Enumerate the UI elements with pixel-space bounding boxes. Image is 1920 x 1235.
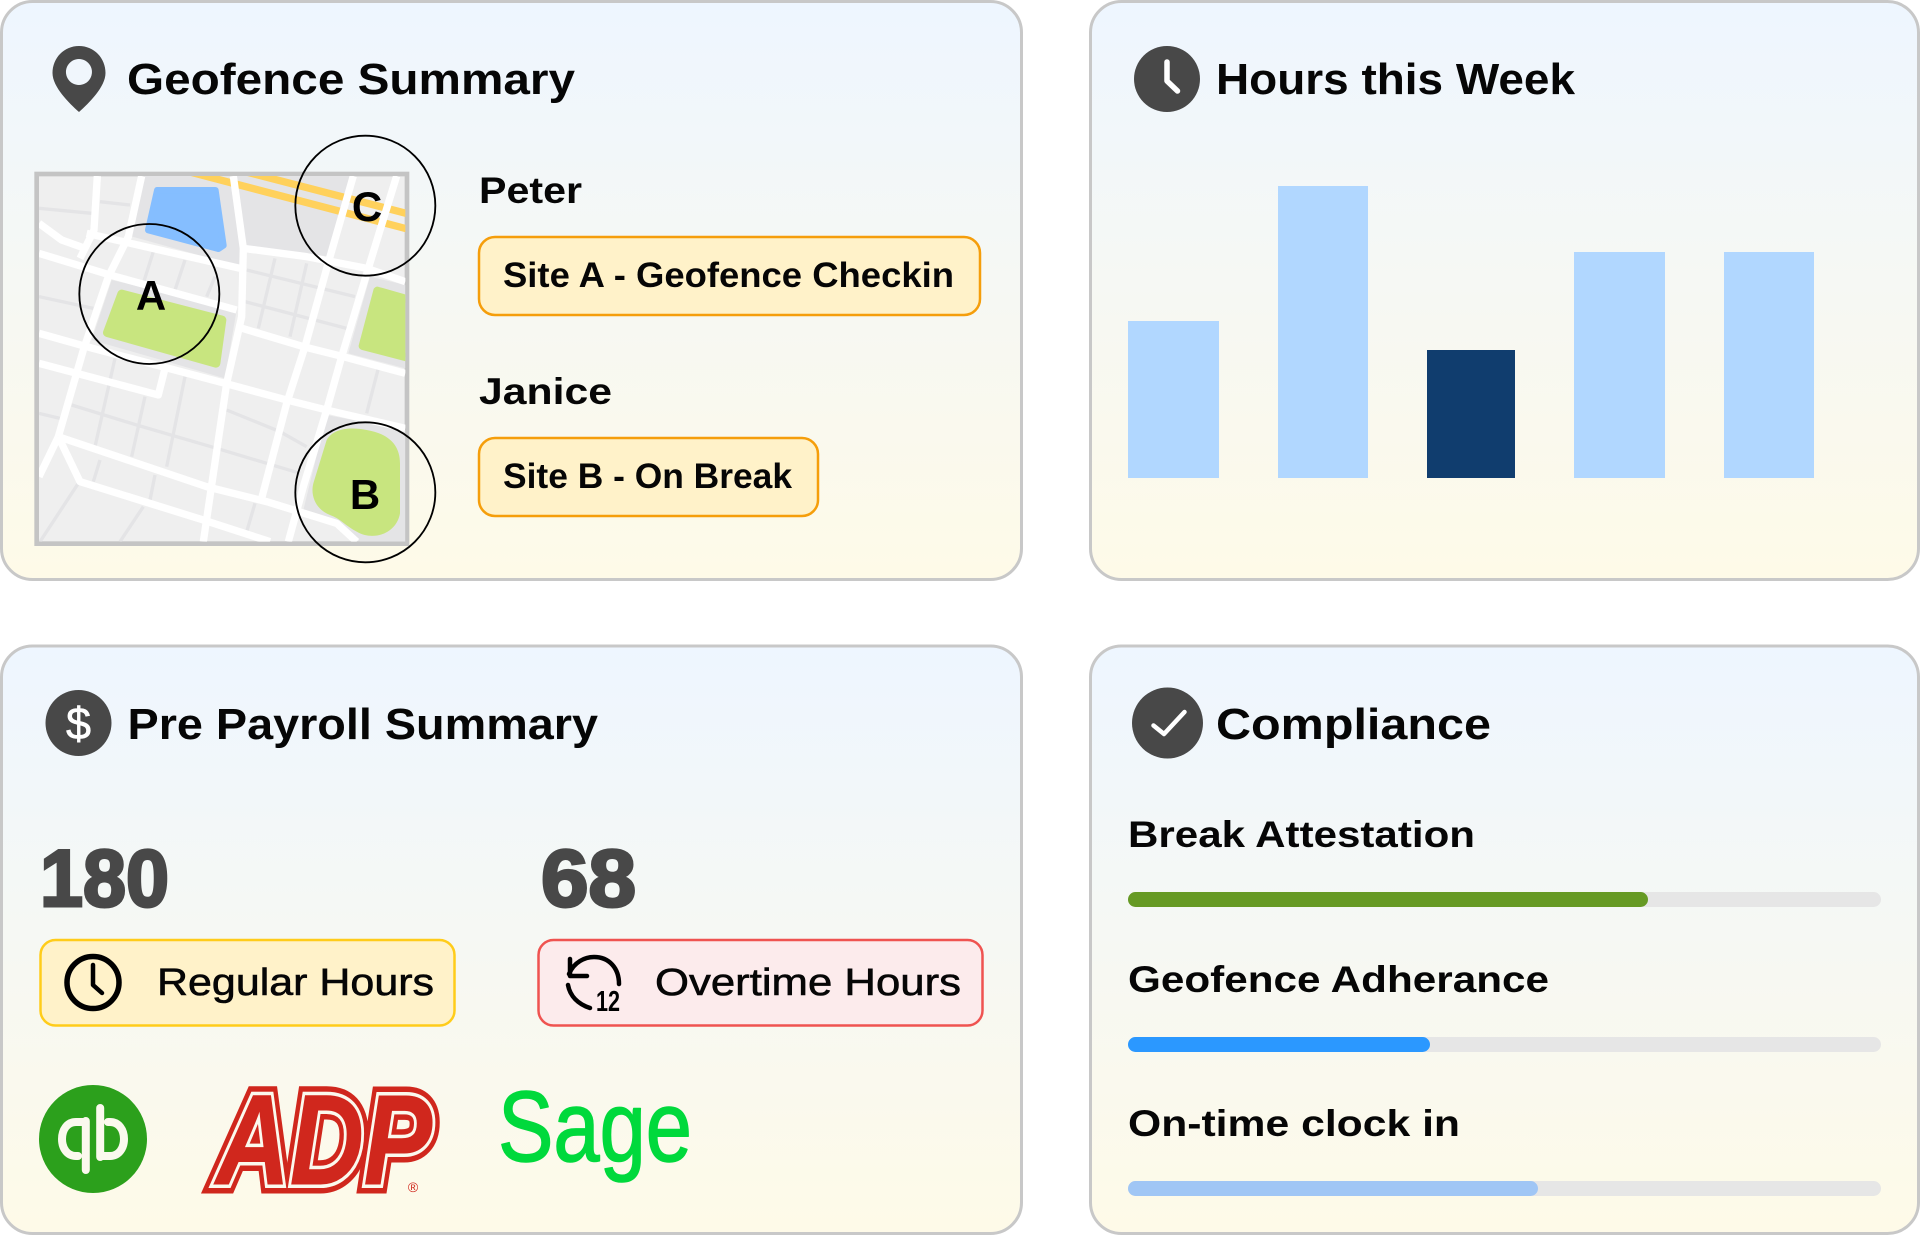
panel: compliance [1090,646,1918,1234]
badge: site B [479,438,818,516]
badge: site B: Site B - On Break [503,457,793,496]
bar chart [1128,186,1814,478]
map [37,136,435,562]
icon: check [1132,688,1203,758]
metric: geofence adherance: Geofence Adherance [1128,959,1549,1000]
icon: clock [1134,46,1200,112]
metric: on-time clock in [1128,1103,1881,1196]
metric: on-time clock in: On-time clock in [1128,1103,1460,1144]
logo: ADP: ADP [214,1069,432,1212]
panel: pre payroll summary [2,646,1022,1234]
metric: break attestation [1128,814,1881,907]
map: C [352,183,382,230]
badge: overtime hours: Overtime Hours [655,962,961,1004]
heading: compliance: Compliance [1216,700,1491,749]
badge: regular hours [40,940,454,1026]
map: B [350,471,380,518]
heading: geofence summary: Geofence Summary [127,55,576,104]
heading: pre payroll summary: Pre Payroll Summary [128,700,599,749]
logo: ADP: ADP [214,1069,432,1212]
metric: geofence adherance [1128,959,1881,1052]
logo: quickbooks [39,1085,147,1193]
map: A [136,272,166,319]
logo: ADP: ® [408,1179,419,1195]
icon: location pin [52,46,106,112]
name: Peter: Peter [479,170,582,211]
icon: dollar [46,690,112,756]
badge: regular hours: Regular Hours [157,962,434,1004]
panel: geofence summary [2,2,1022,580]
badge: site A: Site A - Geofence Checkin [503,256,954,295]
badge: overtime hours: 12 [596,986,620,1018]
icon: dollar: $ [66,698,91,749]
badge: overtime hours [538,940,982,1026]
badge: site A [479,237,980,315]
metric: break attestation: Break Attestation [1128,814,1475,855]
name: Janice: Janice [479,371,612,412]
logo: Sage: Sage [498,1071,692,1183]
metric: 180: 180 [40,834,169,924]
panel: hours this week [1090,2,1918,580]
metric: 68: 68 [541,834,636,924]
heading: hours this week: Hours this Week [1216,55,1576,104]
logo: ADP: ADP [214,1069,432,1212]
